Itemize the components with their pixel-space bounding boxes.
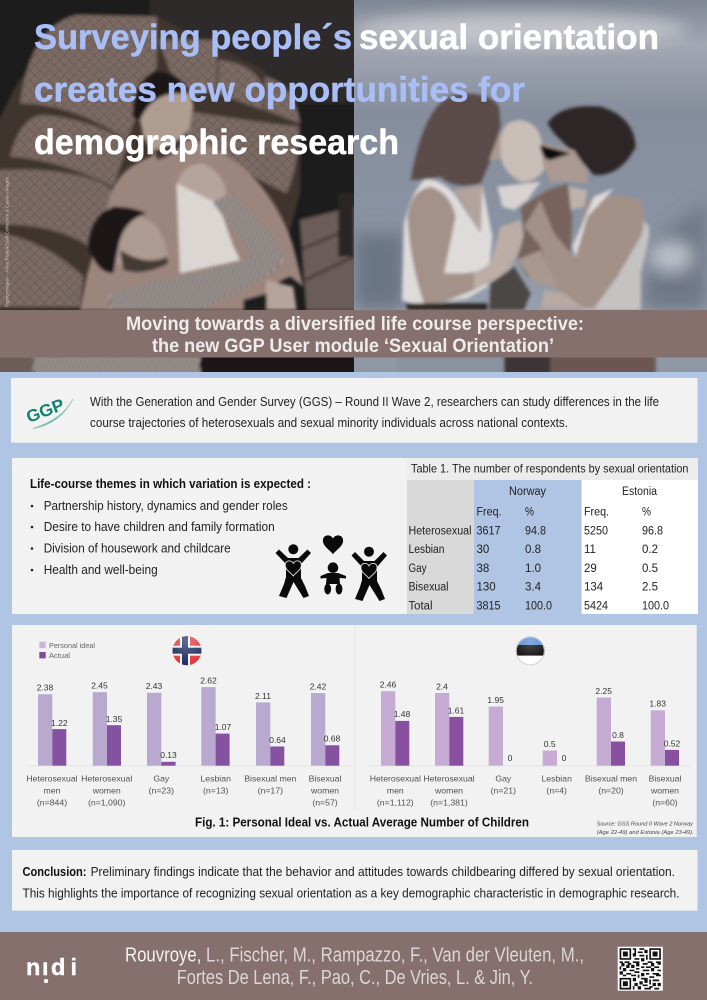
theme list: Health and well-being: [44, 563, 158, 577]
table rows: 2.5: [642, 582, 658, 594]
icon: family with hearts: [276, 535, 387, 601]
table headers: %: [525, 507, 534, 519]
photo: two mothers kissing a baby: [354, 0, 707, 393]
theme list: Partnership history, dynamics and gender roles: [44, 499, 288, 513]
chart legend: [39, 641, 95, 660]
source note: (Age 22-49) and Estonia (Age 23-49).: [597, 830, 694, 836]
title: creates new opportunities for: [34, 70, 525, 110]
theme list: Desire to have children and family formation: [44, 520, 275, 534]
panel: life-course themes: [12, 458, 407, 614]
chart: Estonia: Lesbian: [541, 774, 572, 784]
chart: Norway: (n=17): [258, 785, 283, 795]
panel: introduction: [11, 378, 698, 443]
chart: Norway: (n=13): [203, 785, 228, 795]
table headers: [476, 486, 658, 519]
chart: Norway: men: [44, 785, 61, 795]
chart: Norway: 2.11: [255, 691, 271, 701]
panel: conclusion: Conclusion:: [22, 865, 86, 879]
title: demographic research: [34, 122, 399, 162]
chart legend: Actual: [49, 651, 70, 660]
chart: Estonia: [370, 680, 681, 807]
table rows: 130: [476, 582, 496, 594]
icon: Estonia flag: [515, 636, 546, 666]
chart: Estonia: (n=21): [491, 785, 516, 795]
theme list: Division of housework and childcare: [44, 542, 231, 556]
footer: [0, 932, 707, 1000]
table rows: 134: [584, 582, 604, 594]
chart: Norway: 1.07: [215, 722, 232, 732]
table rows: 94.8: [525, 525, 546, 537]
table rows: 0.8: [525, 544, 541, 556]
chart: Norway: Lesbian: [200, 774, 231, 784]
chart: Norway: 2.62: [200, 676, 217, 686]
chart: Estonia: (n=1,112): [377, 797, 414, 807]
chart: Estonia: (n=60): [652, 797, 678, 807]
table headers: Freq.: [476, 507, 502, 519]
table rows: Gay: [408, 563, 427, 575]
photo credit: ©gettyimages – Alina Rudya/Stall Collection & Cavan Images: [4, 176, 10, 307]
chart: Norway: 2.45: [91, 681, 108, 691]
chart: Estonia: 2.25: [595, 686, 612, 696]
panel: conclusion: Preliminary findings indicate that the behavior and attitudes towards childbearing differed by sexual orientation.: [91, 865, 675, 879]
source note: Source: GSS Round II Wave 2 Norway: [597, 821, 694, 827]
table rows: 3617: [476, 525, 500, 537]
chart: Norway: [26, 676, 341, 807]
table rows: Total: [408, 600, 432, 612]
chart: Estonia: 1.83: [649, 699, 666, 709]
table rows: 11: [584, 544, 596, 556]
chart: Norway: 0.13: [160, 750, 177, 760]
chart: Estonia: women: [434, 785, 463, 795]
intro text: [90, 395, 659, 430]
table rows: 3815: [476, 600, 500, 612]
table rows: 30: [476, 544, 489, 556]
chart: Norway: women: [92, 785, 121, 795]
chart: Estonia: 0.5: [544, 739, 556, 749]
subtitle band: the new GGP User module ‘Sexual Orientation’: [152, 335, 554, 357]
source note: [597, 821, 694, 836]
chart: Estonia: 0: [562, 753, 567, 763]
panel: figure 1: [12, 625, 697, 837]
table rows: 100.0: [642, 600, 669, 612]
table rows: [408, 525, 669, 612]
panel: conclusion: This highlights the importance of recognizing sexual orientation as a key demographic characteristic in demographic research.: [22, 886, 680, 900]
chart: Norway: (n=57): [312, 797, 338, 807]
chart: Estonia: 2.4: [436, 681, 448, 691]
figure caption: Fig. 1: Personal Ideal vs. Actual Average Number of Children: [195, 816, 529, 830]
subtitle band: Moving towards a diversified life course perspective:: [126, 313, 584, 335]
intro text: With the Generation and Gender Survey (GGS) – Round II Wave 2, researchers can study differences in the life: [90, 395, 659, 409]
chart: Estonia: men: [387, 785, 404, 795]
authors: Fortes De Lena, F., Pao, C., De Vries, L. & Jin, Y.: [177, 966, 533, 989]
chart: Norway: 2.42: [310, 682, 327, 692]
heading: themes: Life-course themes in which variation is expected :: [30, 477, 311, 491]
chart: Norway: 0.68: [324, 734, 341, 744]
chart: Estonia: Bisexual: [649, 774, 681, 784]
authors: [125, 944, 584, 989]
chart: Estonia: 1.95: [487, 695, 504, 705]
chart: Estonia: women: [650, 785, 679, 795]
title: Surveying people´s: [34, 17, 352, 57]
chart: Norway: (n=844): [37, 797, 67, 807]
QR code: [618, 947, 663, 991]
title: sexual orientation: [359, 17, 659, 57]
chart: Estonia: 0.8: [612, 730, 624, 740]
chart: Estonia: 1.48: [394, 709, 411, 719]
table rows: 38: [476, 563, 489, 575]
intro text: course trajectories of heterosexuals and sexual minority individuals across national contexts.: [90, 416, 568, 430]
icon: Norway flag: [172, 636, 202, 666]
chart: Estonia: Heterosexual: [370, 774, 421, 784]
table: respondents by sexual orientation: [407, 458, 698, 614]
table rows: 0.2: [642, 544, 658, 556]
chart: Norway: 2.43: [146, 681, 163, 691]
chart: Norway: 1.22: [51, 718, 68, 728]
chart: Estonia: 0: [508, 753, 513, 763]
table headers: Estonia: [622, 486, 658, 498]
chart: Norway: 0.64: [269, 735, 286, 745]
table rows: 96.8: [642, 525, 663, 537]
chart: Estonia: Heterosexual: [423, 774, 475, 784]
table rows: 0.5: [642, 563, 658, 575]
chart: Norway: (n=1,090): [88, 797, 126, 807]
table rows: 1.0: [525, 563, 541, 575]
title: [34, 17, 659, 162]
chart: Estonia: (n=4): [546, 785, 567, 795]
icon: GGP logo: GGP: [24, 395, 67, 427]
table headers: %: [642, 507, 651, 519]
panel: conclusion: [12, 850, 698, 911]
chart: Norway: Bisexual men: [244, 774, 297, 784]
chart: Norway: 1.35: [106, 714, 123, 724]
table rows: Bisexual: [408, 582, 448, 594]
chart: Norway: women: [310, 785, 339, 795]
chart: Norway: 2.38: [37, 683, 54, 693]
chart: Norway: Gay: [153, 774, 170, 784]
chart: Norway: (n=23): [149, 785, 174, 795]
photo: male couple on sofa: [0, 0, 354, 372]
table rows: 5250: [584, 525, 608, 537]
chart: Estonia: (n=20): [598, 785, 624, 795]
chart: Estonia: 0.52: [664, 738, 681, 748]
table rows: 100.0: [525, 600, 552, 612]
chart: Norway: Heterosexual: [26, 774, 78, 784]
chart: Norway: Bisexual: [309, 774, 341, 784]
chart legend: Personal ideal: [49, 641, 95, 650]
chart: Estonia: Gay: [495, 774, 512, 784]
logo: NIDI: nidi: [26, 954, 77, 980]
authors: Rouvroye, L., Fischer, M., Rampazzo, F., Van der Vleuten, M.,: [125, 944, 584, 967]
table headers: Norway: [509, 486, 546, 498]
chart: Estonia: 1.61: [448, 705, 465, 715]
subtitle band: [0, 310, 707, 358]
table headers: Freq.: [584, 507, 609, 519]
theme list: [31, 499, 288, 577]
table rows: Lesbian: [408, 544, 444, 556]
chart: Estonia: 2.46: [380, 680, 397, 690]
chart: Estonia: Bisexual men: [585, 774, 637, 784]
table rows: 3.4: [525, 582, 542, 594]
table rows: Heterosexual: [408, 525, 472, 537]
table rows: 5424: [584, 600, 609, 612]
table rows: 29: [584, 563, 597, 575]
chart: Norway: Heterosexual: [81, 774, 132, 784]
chart: Estonia: (n=1,381): [430, 797, 468, 807]
